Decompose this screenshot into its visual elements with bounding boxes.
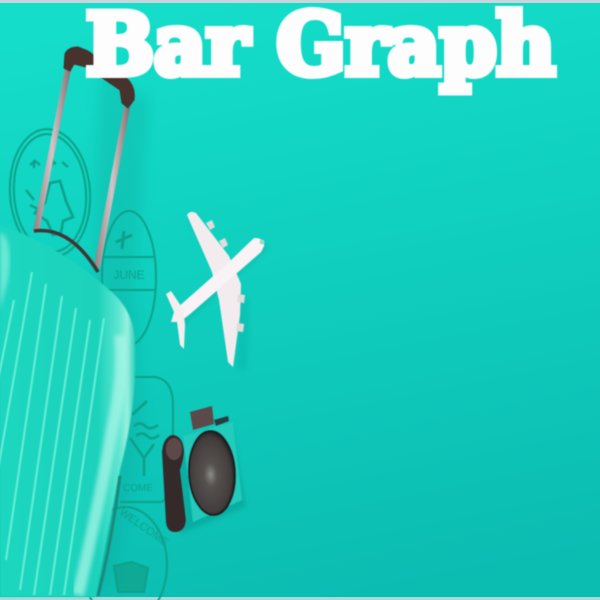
plane nose tip — [260, 240, 264, 244]
plane wings — [187, 212, 241, 367]
camera lens — [187, 430, 237, 516]
suitcase ribs — [0, 272, 104, 595]
suitcase handle — [33, 47, 134, 272]
plane engines — [206, 220, 245, 332]
stamp: welcome rounded box: COME — [123, 483, 153, 494]
plane fuselage — [176, 238, 264, 321]
stamp: welcome round: WELCOME — [117, 506, 170, 549]
camera viewfinder — [190, 406, 214, 430]
stamp: June oval: JUNE — [113, 268, 145, 282]
suitcase edge strap — [98, 476, 120, 596]
handle left pole — [33, 68, 71, 232]
top edge strip — [0, 0, 600, 3]
camera grip — [162, 435, 186, 532]
camera shadow — [170, 425, 246, 534]
stamp: June oval — [102, 211, 156, 345]
camera body — [183, 422, 242, 522]
bottom edge strip — [0, 597, 600, 600]
stamp: welcome round — [83, 506, 170, 600]
plane tail — [166, 291, 185, 349]
icon: camera — [162, 406, 246, 534]
icon: airplane — [166, 212, 266, 370]
luggage shadow — [84, 70, 150, 590]
camera dial — [166, 438, 182, 460]
handle right pole — [94, 107, 130, 268]
handle grip — [64, 47, 134, 108]
suitcase left glow — [0, 232, 10, 310]
stamp: welcome rounded box — [120, 377, 173, 502]
camera shutter knob — [214, 416, 229, 426]
suitcase side highlight — [78, 335, 121, 595]
stamp: oval date stamp — [6, 126, 94, 260]
plane shadow — [180, 218, 266, 370]
suitcase body — [0, 225, 135, 597]
handle base arc — [34, 231, 98, 272]
